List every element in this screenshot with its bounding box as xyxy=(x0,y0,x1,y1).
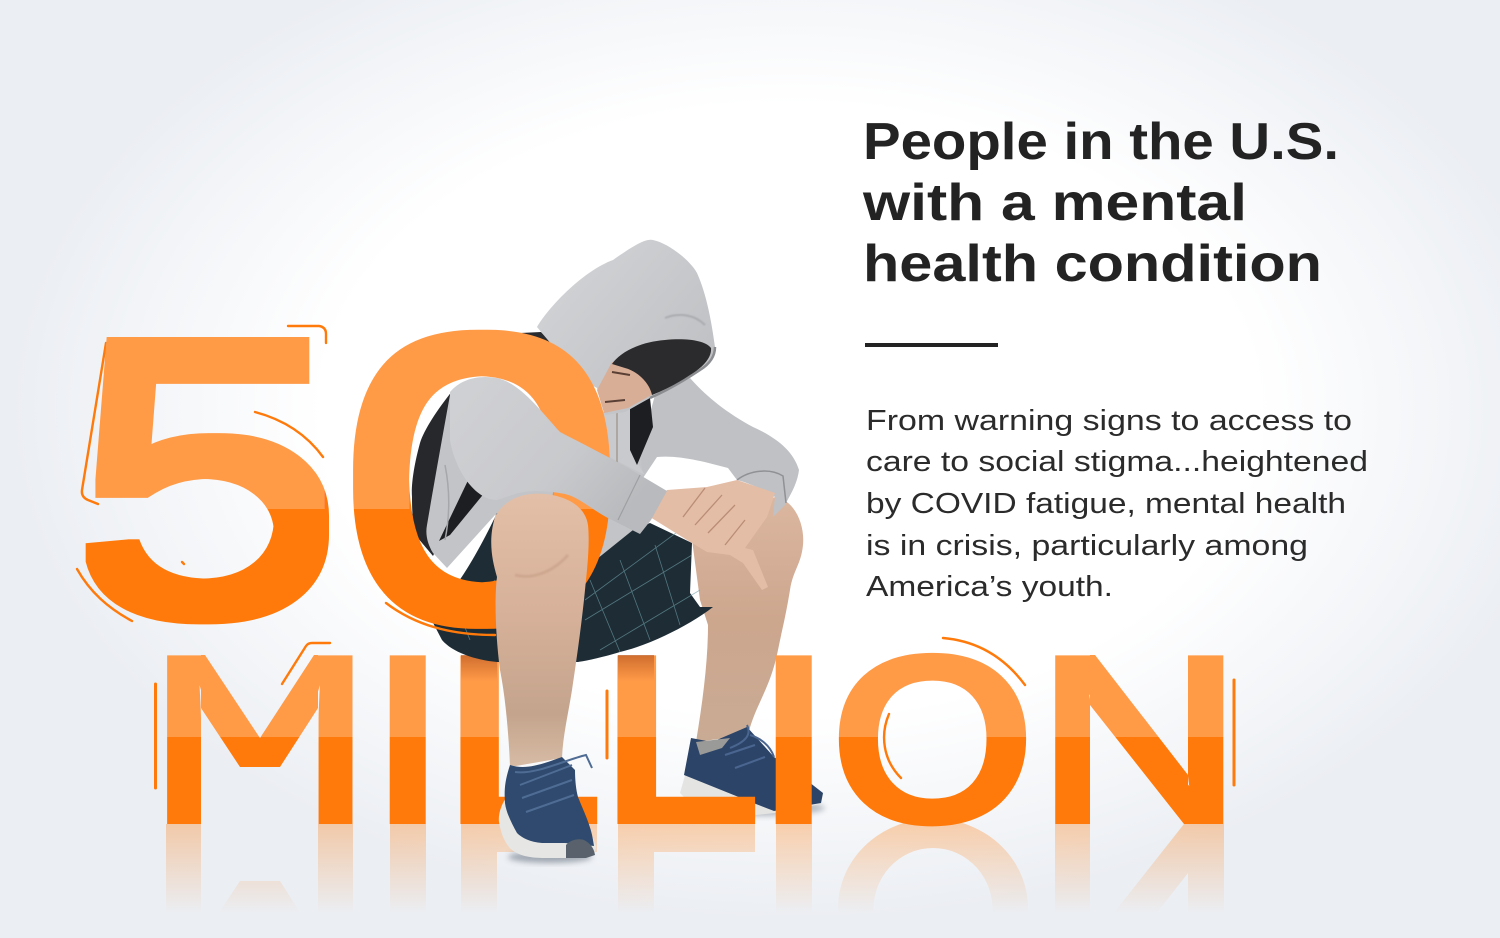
person: front arm, hand, near leg and shoe xyxy=(450,377,775,863)
body text: by COVID fatigue, mental health xyxy=(866,488,1346,520)
big word MILLION xyxy=(167,652,1224,826)
shorts shadow on letters xyxy=(461,655,654,681)
big number 50: 5 xyxy=(71,262,345,694)
body text: America’s youth. xyxy=(866,571,1113,603)
heading: with a mental xyxy=(862,174,1247,232)
heading xyxy=(862,113,1339,293)
body text: care to social stigma...heightened xyxy=(866,446,1368,478)
accent strokes around 5 and MILLION xyxy=(77,326,1234,788)
big word MILLION: I xyxy=(759,603,828,876)
big word MILLION: L xyxy=(600,603,763,876)
big word MILLION: N xyxy=(1036,603,1243,876)
heading: health condition xyxy=(863,235,1322,293)
big number 50 xyxy=(71,257,625,700)
accent stroke under 0 xyxy=(386,603,495,635)
big number 50: 0 xyxy=(338,257,625,700)
heading: People in the U.S. xyxy=(863,113,1339,171)
big word MILLION: O xyxy=(828,602,1037,876)
body text: is in crisis, particularly among xyxy=(866,530,1308,562)
person: rear leg and shoe xyxy=(680,497,825,816)
big word MILLION: M xyxy=(149,603,370,877)
big word MILLION: L xyxy=(443,603,605,877)
body text xyxy=(866,405,1368,603)
body text: From warning signs to access to xyxy=(866,405,1352,437)
decorative floor reflection xyxy=(166,819,1224,914)
person: torso, backpack, hood and head xyxy=(412,240,799,662)
heading divider xyxy=(865,343,998,347)
big word MILLION: I xyxy=(373,603,442,876)
